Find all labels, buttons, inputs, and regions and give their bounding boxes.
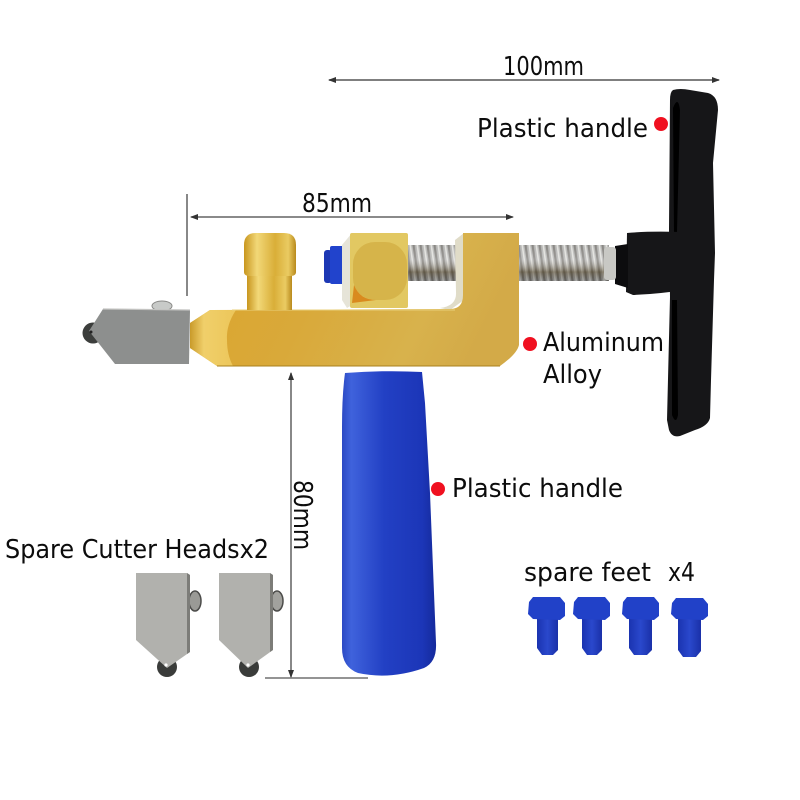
foot 4 (671, 598, 708, 657)
dimension: 85mm: 85mm (302, 189, 372, 219)
gold sliding block (342, 233, 408, 308)
foot 1 (528, 597, 565, 655)
cutter head (82, 301, 190, 364)
threaded screw (405, 245, 616, 281)
label: spare feet: spare feet (524, 558, 651, 588)
callout: aluminum alloy: Aluminum (543, 328, 664, 358)
callout: aluminum alloy: Alloy (543, 360, 602, 390)
cutter head 2 (219, 573, 283, 677)
label: spare cutter heads: Spare Cutter Headsx2 (5, 535, 269, 565)
blue adjusting knob (324, 246, 352, 284)
spare blue feet (528, 597, 708, 657)
dimension: 100mm: 100mm (503, 52, 584, 82)
foot 3 (622, 597, 659, 655)
dimension: 80mm: 80mm (287, 480, 317, 550)
gold pin knob (244, 233, 296, 310)
blue plastic handle (342, 371, 436, 676)
gold aluminum body (190, 233, 519, 366)
spare cutter heads (136, 573, 283, 677)
foot 2 (573, 597, 610, 655)
label: spare feet: x4 (668, 558, 695, 588)
callout: plastic handle (top): Plastic handle (477, 114, 648, 144)
black T handle (615, 89, 718, 436)
cutter head 1 (136, 573, 201, 677)
callout: plastic handle (blue grip): Plastic handle (452, 474, 623, 504)
callout: aluminum alloy (523, 328, 664, 390)
